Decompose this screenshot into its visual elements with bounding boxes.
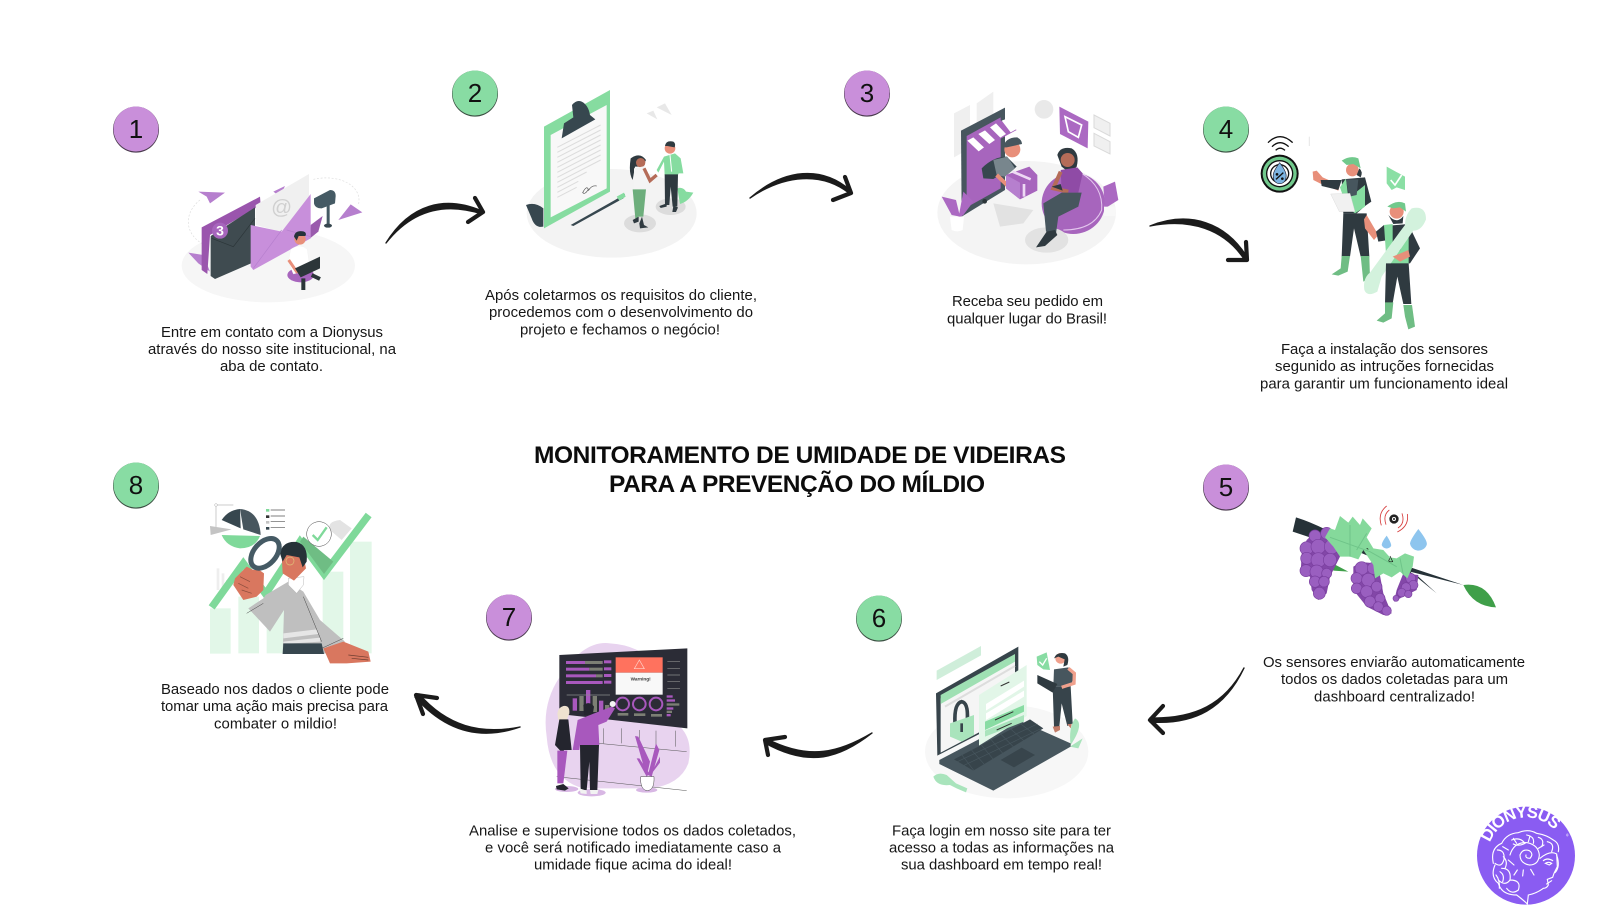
badge 6 [856,596,902,642]
badge 4: 4 [1219,114,1233,144]
illustration: email and person with laptop: @ [271,196,292,219]
caption 1 [148,325,397,375]
caption 5: Os sensores enviarão automaticamente [1263,655,1525,671]
badge 1 [113,106,159,153]
caption 8: combater o mildio! [214,716,337,732]
caption 6 [889,824,1115,874]
badge 7 [486,594,532,641]
badge 6: 6 [872,603,886,633]
caption 8: tomar uma ação mais precisa para [161,699,389,715]
illustration: delivery from phone store [937,92,1118,264]
caption 2: Após coletarmos os requisitos do cliente, [485,288,757,304]
panel: step 1 [113,106,397,375]
caption 1: aba de contato. [220,359,323,375]
caption 6: Faça login em nosso site para ter [892,824,1111,840]
caption 8 [161,682,389,732]
caption 4: segunido as intruções fornecidas [1275,359,1494,375]
arrow 4 to 5 [1150,668,1244,733]
badge 1: 1 [129,114,143,144]
caption 6: acesso a todas as informações na [889,840,1115,856]
caption 1: Entre em contato com a Dionysus [161,325,383,341]
badge 8 [113,462,159,509]
title: PARA A PREVENÇÃO DO MÍLDIO [609,470,985,498]
illustration: dashboard with warning [546,643,690,796]
badge 3: 3 [860,78,874,108]
caption 5: dashboard centralizado! [1314,690,1475,706]
badge 5 [1203,464,1249,511]
title [534,442,1066,498]
logo: Dionysus [1477,806,1575,905]
caption 3: qualquer lugar do Brasil! [947,312,1107,328]
caption 6: sua dashboard em tempo real! [901,858,1102,874]
caption 7: umidade fique acima do ideal! [534,858,732,874]
caption 1: através do nosso site institucional, na [148,342,397,358]
panel: step 2 [452,70,757,338]
panel: step 6 [856,596,1115,874]
panel: step 5 [1203,464,1525,706]
caption 4: Faça a instalação dos sensores [1281,342,1488,358]
icon: humidity sensor [1261,137,1299,193]
panel: step 7 [469,594,796,874]
title: MONITORAMENTO DE UMIDADE DE VIDEIRAS [534,442,1066,469]
arrow 6 to 7 [415,694,520,733]
badge 2: 2 [468,78,482,108]
badge 4 [1203,106,1249,153]
illustration: two technicians [1309,137,1426,329]
arrow 5 to 6 [765,733,872,757]
illustration: grape vine with sensor [1293,506,1496,615]
arrow 3 to 4 [1150,219,1247,260]
badge 5: 5 [1219,472,1233,502]
caption 2: procedemos com o desenvolvimento do [489,305,753,321]
caption 4: para garantir um funcionamento ideal [1260,376,1508,392]
panel: step 8 [113,462,389,732]
caption 3: Receba seu pedido em [952,294,1103,310]
caption 7: e você será notificado imediatamente caso a [485,840,782,856]
caption 2: projeto e fechamos o negócio! [520,322,720,338]
caption 7: Analise e supervisione todos os dados coletados, [469,824,796,840]
caption 4 [1260,342,1508,392]
badge 8: 8 [129,470,143,500]
logo: Dionysus: ® [1566,834,1569,838]
caption 5 [1263,655,1525,706]
panel: step 4 [1203,106,1508,392]
logo: Dionysus: DIONYSUS [1481,806,1560,842]
illustration: contract and handshake [526,90,697,258]
badge 7: 7 [502,602,516,632]
caption 5: todos os dados coletadas para um [1281,672,1508,688]
illustration: email and person with laptop: 3 [216,223,224,239]
caption 8: Baseado nos dados o cliente pode [161,682,389,698]
arrow 2 to 3 [750,174,851,200]
panel: step 3 [844,70,1118,328]
arrow 1 to 2 [386,198,483,243]
illustration: analyst with magnifier and charts [210,504,372,663]
illustration: dashboard with warning: Warning! [631,676,651,681]
caption 3 [947,294,1107,328]
caption 7 [469,824,796,874]
illustration: email and person with laptop [182,174,362,302]
badge 3 [844,70,890,117]
caption 2 [485,288,757,338]
badge 2 [452,70,498,117]
illustration: laptop login [925,646,1088,798]
